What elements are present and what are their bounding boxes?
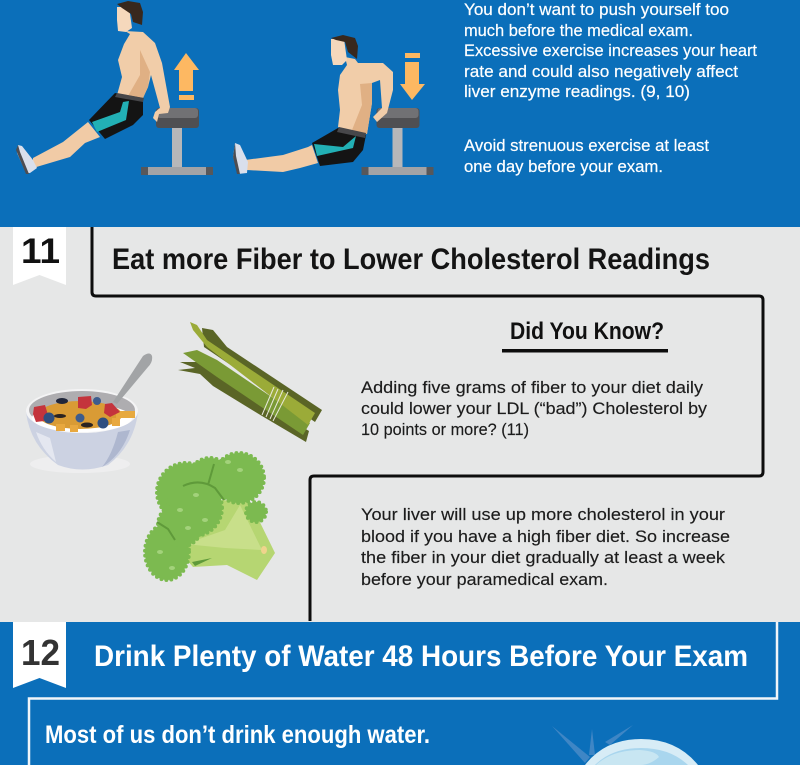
ribbon: number 12 [13, 622, 66, 688]
text block: fiber fact: could lower your LDL (“bad”) Cholesterol by [361, 399, 708, 418]
panel: exercise section background [0, 0, 800, 227]
text block: fiber advice: blood if you have a high fiber diet. So increase [361, 527, 730, 546]
text block: exercise advice: much before the medical exam. [464, 21, 693, 40]
text block: fiber fact: Adding five grams of fiber to your diet daily [361, 378, 704, 397]
text: water statement: Most of us don’t drink enough water. [45, 721, 430, 749]
text block: fiber advice: the fiber in your diet gradually at least a week [361, 548, 726, 567]
heading: water: Drink Plenty of Water 48 Hours Before Your Exam [94, 640, 748, 673]
text block: fiber fact [361, 378, 708, 439]
subheading: did you know [502, 318, 668, 352]
icon: asparagus [178, 322, 322, 442]
panel: fiber section background [0, 227, 800, 622]
illustration: man lowered on bench [233, 35, 434, 175]
text block: fiber advice [361, 505, 730, 589]
text block: fiber advice: Your liver will use up more cholesterol in your [361, 505, 725, 524]
icon: down arrow [400, 53, 425, 100]
subheading: did you know: Did You Know? [510, 318, 664, 345]
text block: exercise advice: liver enzyme readings. (9, 10) [464, 82, 690, 101]
icon: up arrow [174, 53, 199, 100]
outline: water section white frame [29, 622, 777, 765]
ribbon: number 11: 11 [21, 232, 60, 271]
heading: fiber: Eat more Fiber to Lower Cholesterol Readings [112, 243, 710, 276]
text block: exercise advice: You don’t want to push yourself too [464, 0, 729, 19]
text block: exercise advice: rate and could also negatively affect [464, 62, 738, 81]
icon: water drop with rays [552, 725, 698, 765]
text block: exercise advice: one day before your exam. [464, 157, 663, 176]
ribbon: number 11 [13, 227, 66, 285]
panel: water section background [0, 622, 800, 765]
icon: broccoli [145, 453, 275, 580]
ribbon: number 12: 12 [21, 632, 60, 673]
text block: exercise advice: Excessive exercise increases your heart [464, 41, 757, 60]
text block: exercise advice [464, 0, 757, 176]
text block: fiber fact: 10 points or more? (11) [361, 420, 529, 439]
text block: fiber advice: before your paramedical exam. [361, 570, 608, 589]
text block: exercise advice: Avoid strenuous exercise at least [464, 136, 709, 155]
icon: cereal bowl [26, 354, 152, 473]
outline: fiber section connector line [92, 227, 763, 621]
illustration: man raised on bench [16, 1, 213, 175]
